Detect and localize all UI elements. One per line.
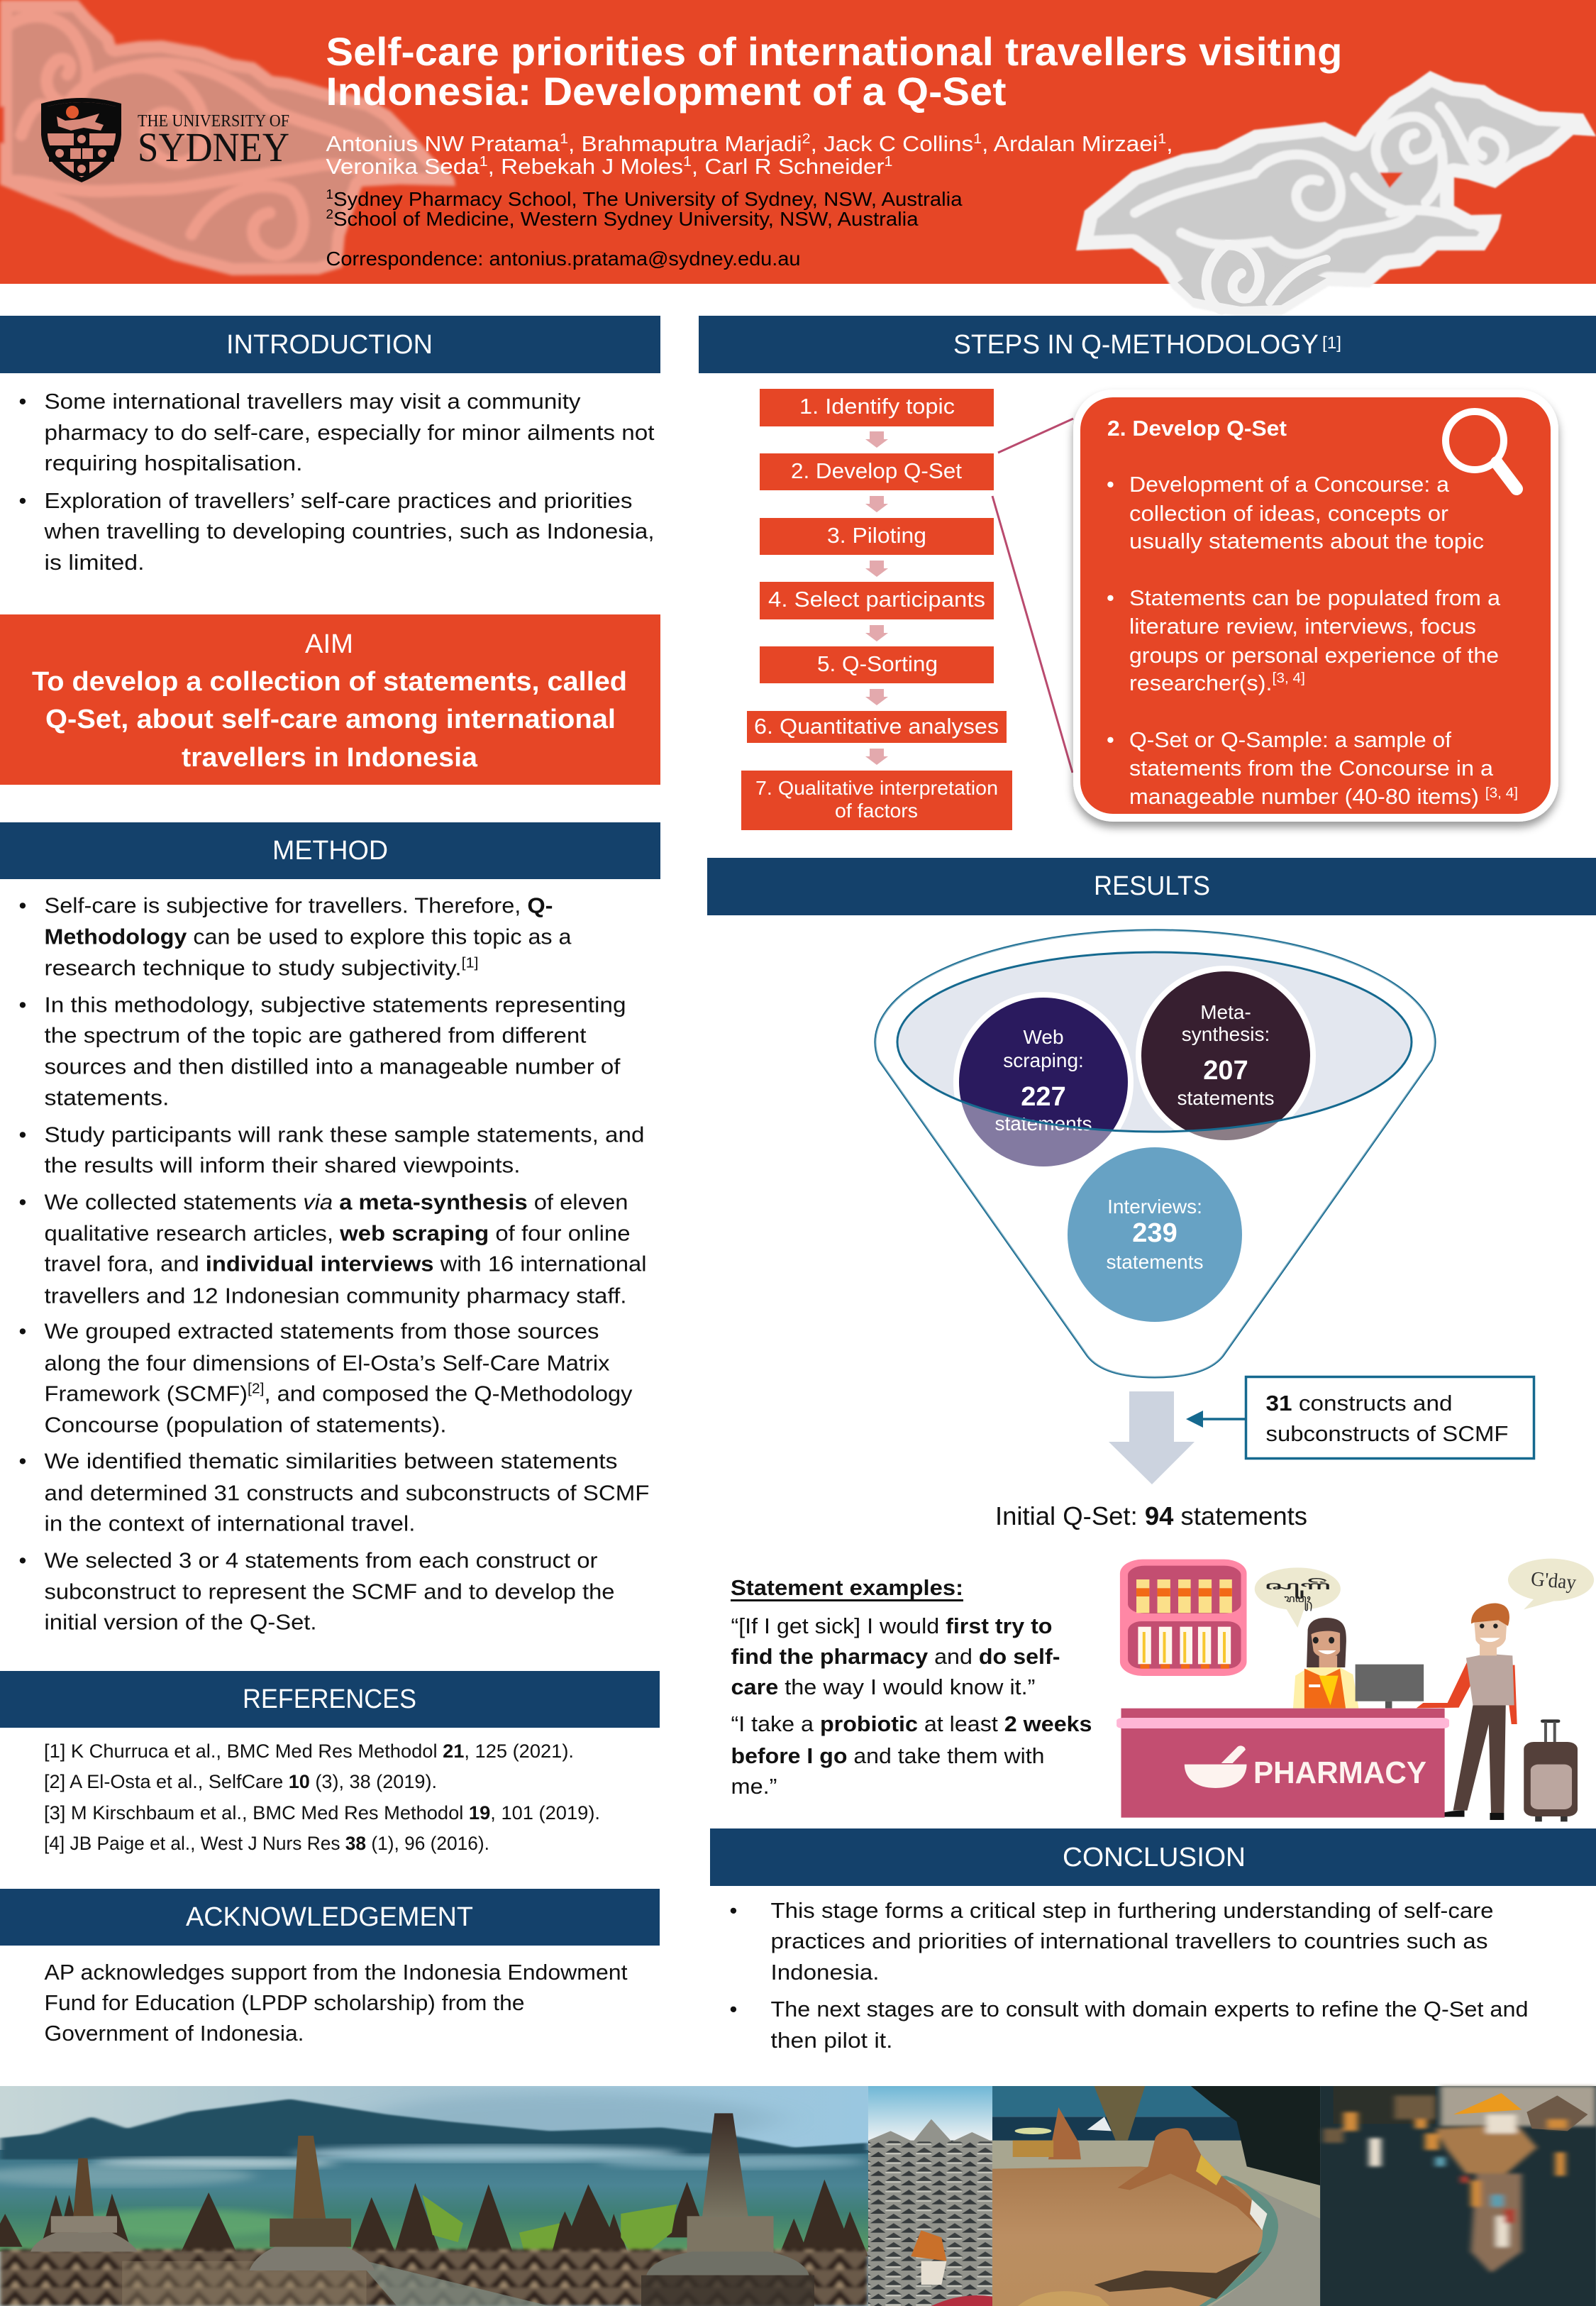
panel: aim: AIM xyxy=(305,629,353,659)
panel: introduction: pharmacy to do self-care, especially for minor ailments not xyxy=(44,420,655,445)
circle: meta-synthesis: Meta- xyxy=(1200,1001,1251,1023)
panel: method: travellers and 12 Indonesian community pharmacy staff. xyxy=(44,1283,627,1308)
callout: develop Q-Set: researcher(s). xyxy=(1129,671,1266,695)
panel: method: subconstruct to represent the SCMF and to develop the xyxy=(44,1579,614,1604)
statement examples: “[If I get sick] I would first try to xyxy=(731,1613,1053,1638)
affiliations: 1 xyxy=(326,187,333,202)
speech bubble: traveller xyxy=(1508,1559,1594,1609)
panel: method: • xyxy=(18,1548,26,1572)
title xyxy=(326,29,1342,114)
panel: conclusion: • xyxy=(729,1997,737,2021)
panel: references xyxy=(0,1671,660,1854)
figure: traveller xyxy=(1417,1603,1517,1820)
panel: method: Framework (SCMF) xyxy=(44,1381,238,1406)
statement examples: find the pharmacy and do self- xyxy=(731,1644,1060,1669)
panel: references: [4] JB Paige et al., West J Nurs Res 38 (1), 96 (2016). xyxy=(44,1833,489,1854)
panel: references: REFERENCES xyxy=(243,1684,416,1714)
authors xyxy=(326,131,1173,179)
panel: method: travel fora, and individual interviews with 16 international xyxy=(44,1252,647,1276)
circle: web scraping: Web xyxy=(1023,1026,1064,1048)
affiliations xyxy=(326,187,963,230)
panel: introduction: Some international travellers may visit a community xyxy=(44,389,581,414)
arrow: constructs to Q-Set xyxy=(1202,1418,1245,1420)
panel: acknowledgement: Fund for Education (LPDP scholarship) from the xyxy=(44,1990,524,2015)
authors: 1 xyxy=(973,131,982,147)
panel: conclusion: practices and priorities of international travellers to countries such as xyxy=(770,1929,1488,1953)
panel: method: the spectrum of the topic are gathered from different xyxy=(44,1023,587,1047)
illustration: pharmacy scene: PHARMACY xyxy=(1253,1755,1426,1790)
connector lines xyxy=(992,419,1073,773)
panel: method: qualitative research articles, web scraping of four online xyxy=(44,1220,630,1246)
circle: meta-synthesis: 207 xyxy=(1203,1056,1248,1086)
step boxes: 4. Select participants xyxy=(768,587,985,612)
callout: constructs: 31 constructs and xyxy=(1265,1391,1453,1416)
affiliations: 2 xyxy=(326,207,333,221)
panel: steps in Q-methodology: STEPS IN Q-METHODOLOGY xyxy=(953,330,1319,360)
panel: conclusion: • xyxy=(729,1898,737,1923)
panel: aim: To develop a collection of statements, called xyxy=(32,667,627,697)
panel: method: • xyxy=(18,1189,26,1215)
panel: method: Concourse (population of statements). xyxy=(44,1412,447,1438)
callout: develop Q-Set: [3, 4] xyxy=(1273,671,1305,686)
panel: acknowledgement: AP acknowledges support from the Indonesia Endowment xyxy=(44,1960,628,1985)
photo strip xyxy=(0,2086,1596,2306)
statement examples: “I take a probiotic at least 2 weeks xyxy=(731,1711,1092,1736)
panel: method: in the context of international travel. xyxy=(44,1511,416,1535)
callout: develop Q-Set: • xyxy=(1107,585,1114,610)
step boxes: 5. Q-Sorting xyxy=(817,651,938,676)
authors: Veronika Seda xyxy=(326,154,469,179)
panel: method: sources and then distilled into a manageable number of xyxy=(44,1054,621,1078)
authors: , Jack C Collins xyxy=(811,131,973,156)
callout: develop Q-Set: groups or personal experience of the xyxy=(1129,643,1499,668)
circle: web scraping xyxy=(956,995,1131,1169)
circle: interviews: 239 xyxy=(1132,1218,1177,1248)
funnel diagram xyxy=(875,930,1435,1377)
stupas xyxy=(31,2113,814,2306)
panel: steps in Q-methodology xyxy=(699,316,1596,830)
circle: meta-synthesis: synthesis: xyxy=(1182,1023,1270,1045)
callout: develop Q-Set: Q-Set or Q-Sample: a sample of xyxy=(1129,727,1451,752)
callout: develop Q-Set: usually statements about the topic xyxy=(1129,529,1484,553)
panel: references: [1] K Churruca et al., BMC Med Res Methodol 21, 125 (2021). xyxy=(44,1740,574,1762)
authors: 1 xyxy=(480,154,488,170)
statement examples: Statement examples: xyxy=(731,1575,963,1600)
panel: method: • xyxy=(18,893,26,918)
panel: introduction: when travelling to developing countries, such as Indonesia, xyxy=(43,519,654,544)
affiliations: School of Medicine, Western Sydney University, NSW, Australia xyxy=(333,208,919,230)
icon: computer monitor xyxy=(1356,1665,1424,1709)
authors: 1 xyxy=(683,154,692,170)
circle: web scraping: 227 xyxy=(1021,1082,1066,1112)
circle: meta-synthesis xyxy=(1138,969,1313,1143)
figure: pharmacist xyxy=(1293,1618,1358,1709)
callout: develop Q-Set: 2. Develop Q-Set xyxy=(1107,416,1287,441)
panel: method: We identified thematic similarities between statements xyxy=(44,1449,617,1473)
circle: meta-synthesis: statements xyxy=(1177,1087,1274,1109)
panel: acknowledgement: ACKNOWLEDGEMENT xyxy=(186,1902,473,1932)
authors: , xyxy=(1166,131,1173,156)
authors: 1 xyxy=(1158,131,1166,147)
statement examples: before I go and take them with xyxy=(731,1743,1044,1768)
panel: acknowledgement xyxy=(0,1889,660,2046)
arrow: funnel to Q-Set xyxy=(1109,1391,1195,1484)
decorative cloud left xyxy=(0,0,455,275)
icon: pharmacy shelf xyxy=(1120,1560,1247,1676)
panel: aim: Q-Set, about self-care among international xyxy=(45,705,616,734)
panel: method: , and composed the Q-Methodology xyxy=(264,1381,633,1406)
logo: University of Sydney xyxy=(41,98,289,182)
panel: method: In this methodology, subjective statements representing xyxy=(44,992,626,1017)
panel: method: We collected statements via a meta-synthesis of eleven xyxy=(44,1189,628,1215)
title: Indonesia: Development of a Q-Set xyxy=(326,69,1006,114)
panel: aim: travellers in Indonesia xyxy=(182,743,478,773)
step arrows xyxy=(865,431,888,765)
panel: conclusion: This stage forms a critical step in furthering understanding of self-care xyxy=(770,1898,1494,1923)
panel: introduction: • xyxy=(18,488,26,513)
panel: method: METHOD xyxy=(272,836,388,866)
panel: introduction xyxy=(0,316,660,575)
step boxes: 2. Develop Q-Set xyxy=(791,458,962,483)
illustration: pharmacy scene: ꦫꦮꦸꦃ xyxy=(1284,1594,1312,1611)
panel: method: • xyxy=(18,992,26,1017)
panel: aim xyxy=(0,614,660,785)
panel: method: • xyxy=(18,1449,26,1473)
panel: results xyxy=(707,858,1596,1821)
illustration: pharmacy scene xyxy=(1116,1559,1594,1821)
callout: develop Q-Set: literature review, interviews, focus xyxy=(1129,614,1476,639)
panel: method: initial version of the Q-Set. xyxy=(44,1609,316,1635)
initial Q-Set label: Initial Q-Set: 94 statements xyxy=(995,1501,1307,1530)
statement examples xyxy=(731,1575,1092,1799)
callout: develop Q-Set xyxy=(1073,390,1558,822)
panel: introduction: INTRODUCTION xyxy=(226,330,433,360)
callout: develop Q-Set: [3, 4] xyxy=(1485,785,1518,801)
panel: acknowledgement: Government of Indonesia. xyxy=(44,2021,304,2046)
panel: method: along the four dimensions of El-Osta’s Self-Care Matrix xyxy=(44,1351,610,1375)
circle: interviews xyxy=(1068,1147,1242,1322)
circle: web scraping: statements xyxy=(995,1113,1092,1135)
illustration: pharmacy scene: ꦱꦸꦒꦼꦁ xyxy=(1264,1578,1331,1599)
authors: 2 xyxy=(802,131,811,147)
panel: method: • xyxy=(18,1122,26,1147)
panel: steps in Q-methodology: [1] xyxy=(1322,333,1341,353)
pharmacy counter xyxy=(1116,1709,1449,1818)
panel: method: We grouped extracted statements from those sources xyxy=(44,1318,599,1344)
panel: method: statements. xyxy=(44,1086,169,1110)
statement examples: me.” xyxy=(731,1774,777,1799)
authors: 1 xyxy=(885,154,892,170)
panel: method: the results will inform their shared viewpoints. xyxy=(44,1152,521,1178)
panel: method: We selected 3 or 4 statements from each construct or xyxy=(44,1548,597,1572)
photo: street scene xyxy=(1320,2086,1596,2306)
step boxes: 1. Identify topic xyxy=(799,394,955,419)
affiliations: Sydney Pharmacy School, The University of Sydney, NSW, Australia xyxy=(333,188,963,210)
panel: results: RESULTS xyxy=(1094,871,1210,901)
correspondence: Correspondence: antonius.pratama@sydney.edu.au xyxy=(326,248,800,270)
authors: , Brahmaputra Marjadi xyxy=(568,131,802,156)
panel: method: Self-care is subjective for travellers. Therefore, Q- xyxy=(44,893,553,918)
callout: constructs: subconstructs of SCMF xyxy=(1265,1421,1508,1446)
authors: , Ardalan Mirzaei xyxy=(982,131,1158,156)
logo: University of Sydney: THE UNIVERSITY OF xyxy=(138,112,289,131)
step boxes: 3. Piloting xyxy=(827,523,926,548)
icon: magnifier xyxy=(1446,412,1517,489)
callout: develop Q-Set: Development of a Concourse: a xyxy=(1129,472,1450,497)
panel: method: research technique to study subjectivity. xyxy=(44,955,433,981)
callout: develop Q-Set: • xyxy=(1107,727,1114,752)
panel: method: Study participants will rank these sample statements, and xyxy=(44,1122,644,1147)
panel: conclusion: then pilot it. xyxy=(770,2028,892,2053)
callout: develop Q-Set: Statements can be populated from a xyxy=(1129,585,1501,610)
authors: 1 xyxy=(560,131,568,147)
panel: introduction: requiring hospitalisation. xyxy=(44,451,302,475)
callout: constructs xyxy=(1246,1377,1534,1459)
step boxes: 7. Qualitative interpretation xyxy=(755,777,998,799)
photo: temple with tourists xyxy=(868,2086,992,2306)
panel: references: [2] A El-Osta et al., SelfCare 10 (3), 38 (2019). xyxy=(44,1771,437,1792)
decorative cloud right xyxy=(1076,71,1596,317)
illustration: pharmacy scene: G'day xyxy=(1530,1567,1578,1594)
panel: introduction: • xyxy=(18,389,26,414)
panel: method xyxy=(0,822,660,1635)
icon: suitcase xyxy=(1524,1719,1578,1821)
panel: method: [1] xyxy=(462,955,478,971)
callout: develop Q-Set: collection of ideas, concepts or xyxy=(1129,501,1448,526)
statement examples: care the way I would know it.” xyxy=(731,1675,1036,1699)
circle: interviews: Interviews: xyxy=(1107,1196,1202,1218)
panel: conclusion: CONCLUSION xyxy=(1063,1843,1246,1872)
callout: develop Q-Set: manageable number (40-80 items) xyxy=(1129,784,1467,809)
header banner xyxy=(0,0,1596,284)
step boxes: of factors xyxy=(835,800,918,822)
logo: University of Sydney: SYDNEY xyxy=(138,124,289,170)
panel: method: and determined 31 constructs and subconstructs of SCMF xyxy=(44,1480,650,1506)
photo: skater in bowl xyxy=(992,2086,1320,2306)
circle: web scraping: scraping: xyxy=(1003,1049,1084,1071)
panel: method: • xyxy=(18,1318,26,1344)
panel: conclusion xyxy=(710,1828,1596,2053)
speech bubble: shop assistant xyxy=(1255,1567,1341,1628)
title: Self-care priorities of international travellers visiting xyxy=(326,29,1342,74)
panel: introduction: Exploration of travellers’ self-care practices and priorities xyxy=(44,488,633,513)
photo: Borobudur temple xyxy=(0,2086,868,2306)
panel: conclusion: Indonesia. xyxy=(770,1960,880,1985)
panel: method: [2] xyxy=(248,1381,264,1396)
panel: introduction: is limited. xyxy=(44,550,145,575)
callout: develop Q-Set: statements from the Concourse in a xyxy=(1129,756,1494,780)
panel: method: Methodology can be used to explore this topic as a xyxy=(44,924,572,949)
authors: , Rebekah J Moles xyxy=(488,154,683,179)
authors: Antonius NW Pratama xyxy=(326,131,543,156)
step boxes: 6. Quantitative analyses xyxy=(754,714,999,739)
callout: develop Q-Set: • xyxy=(1107,472,1114,497)
authors: , Carl R Schneider xyxy=(692,154,885,179)
panel: conclusion: The next stages are to consult with domain experts to refine the Q-Set and xyxy=(770,1997,1528,2021)
step boxes xyxy=(741,389,1012,830)
circle: interviews: statements xyxy=(1107,1251,1203,1273)
panel: references: [3] M Kirschbaum et al., BMC Med Res Methodol 19, 101 (2019). xyxy=(44,1802,600,1824)
